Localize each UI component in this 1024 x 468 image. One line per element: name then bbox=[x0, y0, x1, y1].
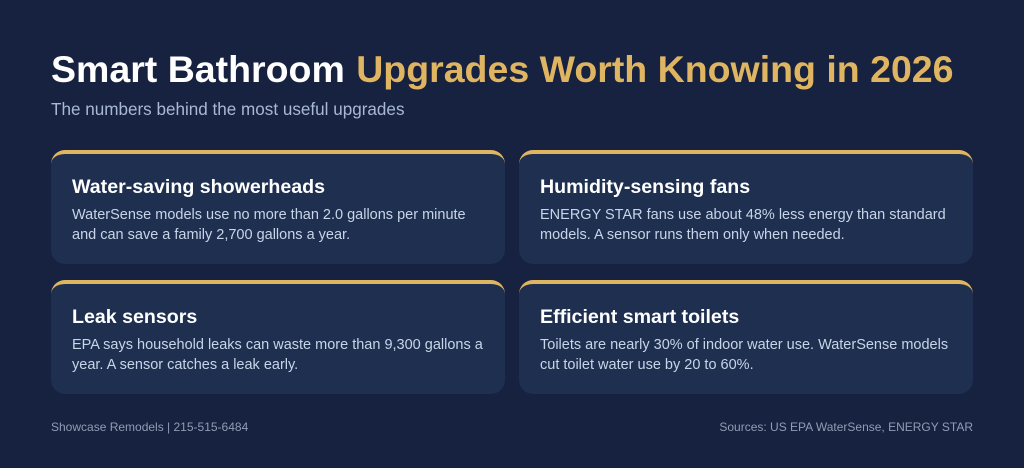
text: fans bbox=[540, 207, 946, 243]
text: leak sensors bbox=[72, 337, 483, 373]
heading: showerheads: Water-saving showerheads bbox=[72, 176, 325, 198]
text: toilets: Toilets are nearly 30% of indoor water use. WaterSense models bbox=[540, 337, 948, 353]
text: leak sensors: EPA says household leaks can waste more than 9,300 gallons a bbox=[72, 337, 483, 353]
subtitle: The numbers behind the most useful upgrades bbox=[51, 100, 404, 119]
text: showerheads: WaterSense models use no more than 2.0 gallons per minute bbox=[72, 207, 466, 223]
text: toilets: cut toilet water use by 20 to 60%. bbox=[540, 357, 754, 373]
panel: leak sensors bbox=[51, 280, 505, 394]
panel: humidity-sensing fans bbox=[519, 150, 973, 264]
text: fans: ENERGY STAR fans use about 48% less energy than standard bbox=[540, 207, 946, 223]
text: leak sensors: year. A sensor catches a leak early. bbox=[72, 357, 298, 373]
footer: company: Showcase Remodels | 215-515-6484 bbox=[51, 420, 248, 434]
heading: leak sensors: Leak sensors bbox=[72, 306, 197, 328]
text: showerheads bbox=[72, 207, 466, 243]
heading: fans: Humidity-sensing fans bbox=[540, 176, 750, 198]
title: Smart Bathroom Upgrades Worth Knowing in 2026 bbox=[51, 48, 954, 90]
text: showerheads: and can save a family 2,700 gallons a year. bbox=[72, 227, 350, 243]
panel: water-saving showerheads bbox=[51, 150, 505, 264]
heading: toilets: Efficient smart toilets bbox=[540, 306, 739, 328]
text: fans: models. A sensor runs them only when needed. bbox=[540, 227, 845, 243]
panel: efficient smart toilets bbox=[519, 280, 973, 394]
text: toilets bbox=[540, 337, 948, 373]
footer: sources: Sources: US EPA WaterSense, ENERGY STAR bbox=[719, 420, 973, 434]
